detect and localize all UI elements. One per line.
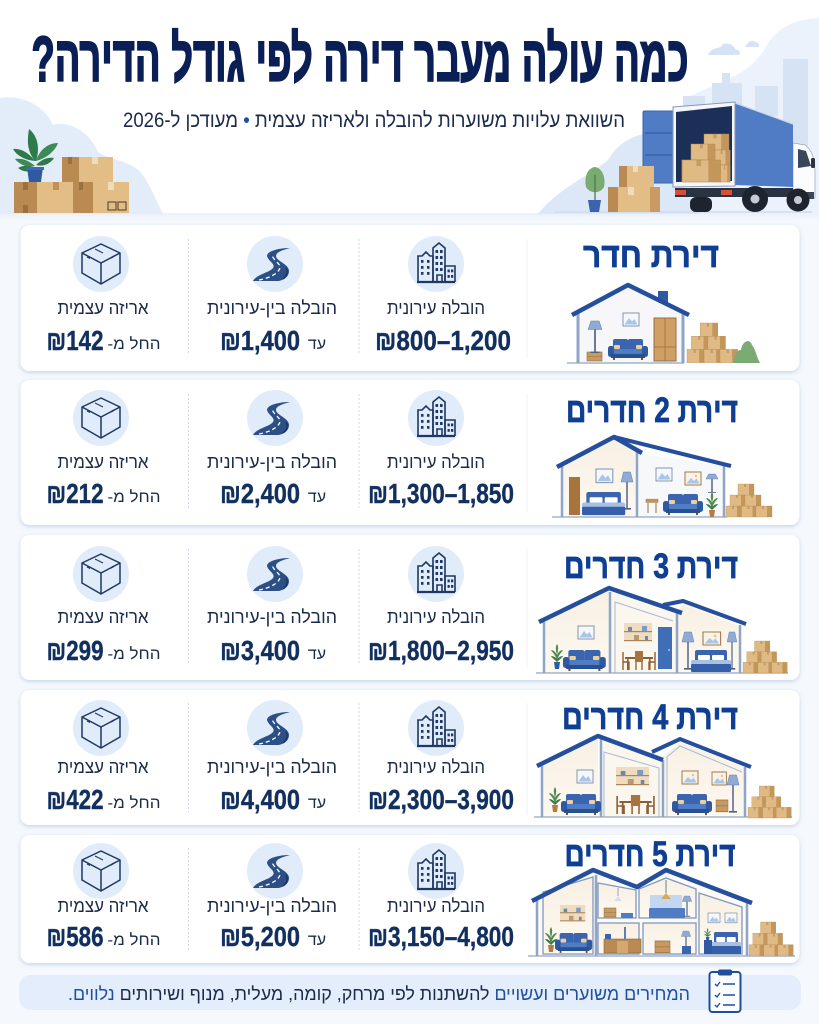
heading: דירת חדר <box>583 236 719 275</box>
column: city move: הובלה עירונית <box>387 757 485 777</box>
column: city move <box>368 843 514 952</box>
column: self packing: החל מ- <box>108 931 160 949</box>
column: intercity move: עד <box>308 489 326 506</box>
heading: דירת 4 חדרים <box>562 698 738 737</box>
column: intercity move <box>207 390 337 509</box>
column: intercity move: הובלה בין-עירונית <box>207 896 337 916</box>
column: city move: ₪1,800–2,950 <box>368 635 514 666</box>
column: intercity move: הובלה בין-עירונית <box>207 452 337 472</box>
column: intercity move: ₪4,400 <box>220 784 300 815</box>
column: city move: ₪2,300–3,900 <box>368 784 514 815</box>
column: intercity move: ₪1,400 <box>220 325 300 356</box>
column: intercity move: עד <box>308 336 326 353</box>
column: self packing: החל מ- <box>108 488 160 506</box>
illustration: city skyline and moving truck, right of header <box>538 18 819 214</box>
heading: דירת 3 חדרים <box>564 547 738 586</box>
column: self packing: אריזה עצמית <box>58 896 149 916</box>
panel: three rooms apartment <box>20 535 800 680</box>
column: self packing <box>46 390 160 509</box>
panel: five rooms apartment <box>20 835 800 963</box>
illustration: boxes and plant with cloud, left of header <box>0 97 163 214</box>
column: city move <box>368 700 514 815</box>
column: city move: הובלה עירונית <box>387 298 485 318</box>
column: intercity move: ₪3,400 <box>220 635 300 666</box>
column: city move: הובלה עירונית <box>387 452 485 472</box>
column: intercity move: הובלה בין-עירונית <box>207 607 337 627</box>
column: self packing: אריזה עצמית <box>58 757 149 777</box>
column: city move <box>368 390 514 509</box>
column: self packing: ₪422 <box>46 784 104 815</box>
heading: דירת 2 חדרים <box>566 391 738 430</box>
icon: clipboard checklist <box>710 970 740 1012</box>
column: city move: הובלה עירונית <box>387 896 485 916</box>
column: self packing: החל מ- <box>108 794 160 812</box>
column: self packing: ₪212 <box>46 478 104 509</box>
column: intercity move <box>207 236 337 356</box>
column: intercity move: הובלה בין-עירונית <box>207 757 337 777</box>
column: self packing: אריזה עצמית <box>58 452 149 472</box>
column: intercity move <box>207 843 337 952</box>
column: intercity move: עד <box>308 646 326 663</box>
column: self packing <box>46 236 160 356</box>
column: self packing <box>46 843 160 952</box>
illustration: two room house <box>552 437 772 517</box>
column: intercity move: עד <box>308 932 326 949</box>
boxes next to truck <box>608 166 660 212</box>
footer note: המחירים משוערים ועשויים להשתנות לפי מרחק, קומה, מעלית, מנוף ושירותים נלווים. <box>68 984 690 1004</box>
column: self packing: ₪299 <box>46 635 104 666</box>
truck chassis and wheels <box>675 186 810 212</box>
illustration: studio house <box>567 285 760 363</box>
boxes in truck <box>682 134 730 182</box>
column: self packing <box>46 546 160 666</box>
column: city move <box>368 546 514 666</box>
column: self packing <box>46 700 160 815</box>
column: self packing: החל מ- <box>108 645 160 663</box>
potted plant <box>585 167 605 212</box>
column: self packing: החל מ- <box>108 335 160 353</box>
truck cab <box>793 143 815 199</box>
panel: studio apartment <box>20 225 800 371</box>
illustration: three room house <box>536 588 788 673</box>
column: city move: ₪3,150–4,800 <box>368 921 514 952</box>
heading: דירת 5 חדרים <box>564 835 736 874</box>
column: city move: ₪1,300–1,850 <box>368 478 514 509</box>
subtitle: השוואת עלויות משוערות להובלה ולאריזה עצמית • מעודכן ל-2026 <box>123 109 625 132</box>
truck door <box>643 111 673 183</box>
panel: two rooms apartment <box>20 380 800 525</box>
column: city move: ₪800–1,200 <box>375 325 511 356</box>
illustration: four room house <box>534 736 792 818</box>
column: intercity move: עד <box>308 795 326 812</box>
column: self packing: אריזה עצמית <box>58 298 149 318</box>
column: intercity move: הובלה בין-עירונית <box>207 298 337 318</box>
column: self packing: ₪142 <box>46 325 104 356</box>
column: intercity move: ₪2,400 <box>220 478 300 509</box>
column: self packing: ₪586 <box>46 921 104 952</box>
panel: four rooms apartment <box>20 690 800 825</box>
column: self packing: אריזה עצמית <box>58 607 149 627</box>
column: city move <box>375 236 511 356</box>
footer note <box>19 975 801 1010</box>
column: intercity move <box>207 700 337 815</box>
column: intercity move <box>207 546 337 666</box>
illustration: five room house <box>528 870 795 956</box>
column: city move: הובלה עירונית <box>387 607 485 627</box>
truck box <box>673 102 793 187</box>
column: intercity move: ₪5,200 <box>220 921 300 952</box>
